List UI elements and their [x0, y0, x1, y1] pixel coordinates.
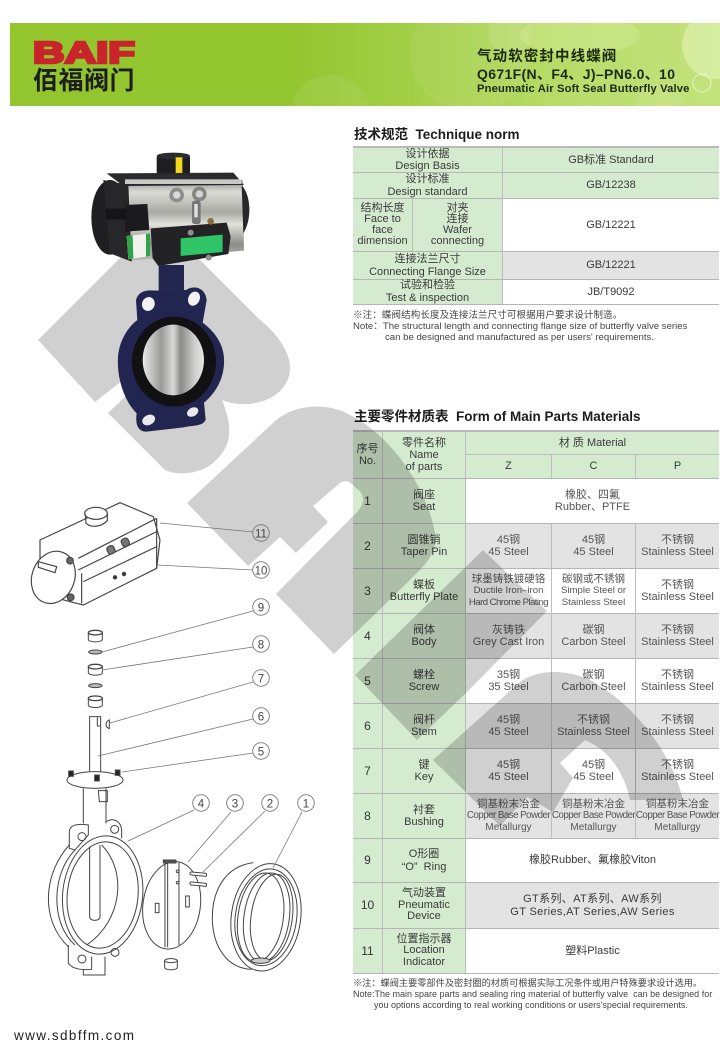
row 5 screw: Stainless Steel — [641, 681, 714, 693]
part number callouts: 8 — [258, 640, 264, 652]
part number callouts: 1 — [303, 798, 309, 810]
table header: 零件名称 — [402, 437, 446, 449]
row 11 location indicator: 位置指示器 — [396, 933, 452, 945]
actuator drawing — [24, 503, 160, 610]
table: technique norm — [353, 146, 719, 305]
row 4 body: Carbon Steel — [561, 636, 626, 648]
table header: C — [590, 460, 597, 472]
row: face to face: 结构长度 — [360, 202, 404, 214]
table: main parts materials — [353, 430, 719, 974]
product title: Q671F(N、F4、J)–PN6.0、10 — [477, 66, 675, 82]
row: face to face: face — [372, 224, 393, 236]
row 11 location indicator: Indicator — [403, 956, 445, 968]
row 8 bushing: Copper Base Powder — [552, 810, 635, 821]
heading: main parts materials: 主要零件材质表 Form of Main Parts Materials — [354, 409, 641, 424]
row 10 pneumatic device: GT Series,AT Series,AW Series — [510, 906, 675, 918]
row 3 butterfly plate: Ductile Iron–iron — [474, 585, 543, 596]
row 7 key: 45钢 — [497, 759, 520, 771]
row 11 location indicator: 塑料Plastic — [565, 945, 620, 957]
table header: Name — [409, 449, 439, 461]
row 1 seat: 阀座 — [413, 489, 435, 501]
part number callouts: 2 — [267, 798, 273, 810]
row: design basis: 设计依据 — [405, 148, 449, 160]
row 3 butterfly plate: Simple Steel or — [561, 585, 626, 596]
note: main parts materials: you options according to real working conditions or users'special requirements. — [374, 1000, 688, 1010]
row: flange size: 连接法兰尺寸 — [394, 252, 460, 264]
row 6 stem: Stainless Steel — [641, 726, 714, 738]
row 7 key: 7 — [364, 764, 371, 778]
table header: No. — [359, 455, 376, 467]
row: design standard: Design standard — [387, 186, 468, 198]
row 7 key: Stainless Steel — [641, 771, 714, 783]
row 9 o ring: “O” Ring — [402, 860, 446, 872]
row 9 o ring: 橡胶Rubber、氟橡胶Viton — [529, 854, 656, 866]
row 8 bushing: 衬套 — [413, 804, 435, 816]
row 4 body: 碳钢 — [582, 624, 604, 636]
part number callouts: 4 — [198, 798, 205, 810]
row 6 stem: Stainless Steel — [557, 726, 630, 738]
banner bubbles — [291, 23, 720, 106]
part number callouts: 10 — [255, 566, 267, 578]
row 7 key — [353, 749, 719, 794]
part number callouts — [193, 525, 314, 811]
row 11 location indicator — [353, 929, 719, 974]
row 5 screw: Carbon Steel — [561, 681, 626, 693]
row: face to face: Face to — [364, 213, 401, 225]
row 2 taper pin: 不锈钢 — [661, 534, 694, 546]
row 4 body: 4 — [364, 629, 371, 643]
note: technique norm: can be designed and manufactured as per users' requirements. — [385, 332, 654, 343]
row 1 seat — [353, 479, 719, 524]
row: design standard: 设计标准 — [405, 173, 449, 185]
row 3 butterfly plate: Butterfly Plate — [390, 591, 458, 603]
row 5 screw — [353, 659, 719, 704]
row: design basis: GB标准 Standard — [568, 154, 654, 166]
row 3 butterfly plate: 碳钢或不锈钢 — [562, 573, 625, 585]
row: face to face: GB/12221 — [586, 219, 636, 231]
row 2 taper pin: 2 — [364, 539, 371, 553]
row 7 key: 45 Steel — [573, 771, 614, 783]
row 3 butterfly plate: 蝶板 — [413, 579, 435, 591]
row: face to face: 对夹 — [446, 202, 468, 214]
row 8 bushing: Bushing — [404, 816, 444, 828]
row 10 pneumatic device: Pneumatic — [398, 899, 450, 911]
row 10 pneumatic device: 气动装置 — [402, 887, 446, 899]
row 3 butterfly plate: Hard Chrome Plating — [469, 597, 548, 608]
row 9 o ring: O形圈 — [409, 848, 439, 860]
row 9 o ring: 9 — [364, 853, 371, 867]
logo chinese name: 佰福阀门 — [33, 67, 135, 95]
row 7 key: 45 Steel — [488, 771, 529, 783]
row: flange size: GB/12221 — [586, 259, 636, 271]
row 8 bushing: 8 — [364, 809, 371, 823]
row: test: Test & inspection — [386, 292, 469, 304]
row: design standard: GB/12238 — [586, 179, 636, 191]
row 5 screw: 螺栓 — [413, 669, 435, 681]
row 3 butterfly plate — [353, 569, 719, 614]
row 6 stem: 45 Steel — [488, 726, 529, 738]
row 1 seat: Seat — [413, 501, 435, 513]
row 6 stem: 阀杆 — [413, 714, 435, 726]
solenoid valve — [106, 204, 231, 266]
row 2 taper pin: 45 Steel — [573, 546, 614, 558]
row 2 taper pin: 45 Steel — [488, 546, 529, 558]
note: technique norm: ※注：蝶阀结构长度及连接法兰尺寸可根据用户要求设计制造。 — [353, 310, 622, 321]
product title — [477, 48, 689, 95]
row: face to face: dimension — [357, 235, 408, 247]
table header: 序号 — [356, 443, 378, 455]
header banner — [10, 23, 720, 106]
row 10 pneumatic device: 10 — [361, 898, 374, 912]
actuator — [91, 173, 249, 262]
table header: of parts — [406, 461, 442, 473]
row 6 stem: 45钢 — [497, 714, 520, 726]
table header: 材 质 Material — [559, 437, 626, 449]
row 5 screw: 碳钢 — [582, 669, 604, 681]
row 6 stem: Stem — [411, 726, 437, 738]
row 4 body: 阀体 — [413, 624, 435, 636]
row 7 key: 45钢 — [582, 759, 605, 771]
valve body — [118, 265, 224, 432]
row 8 bushing: 铜基粉末冶金 — [477, 798, 540, 810]
row: design standard — [353, 173, 719, 199]
row 3 butterfly plate: 球墨铸铁镀硬铬 — [472, 573, 545, 585]
note: technique norm: Note：The structural length and connecting flange size of butterfly valve series — [353, 321, 687, 332]
row 6 stem: 6 — [364, 719, 371, 733]
row 5 screw: 5 — [364, 674, 371, 688]
row 7 key: 不锈钢 — [661, 759, 694, 771]
row 5 screw: Screw — [409, 681, 439, 693]
row 2 taper pin: Taper Pin — [401, 546, 447, 558]
row 10 pneumatic device: GT系列、AT系列、AW系列 — [523, 893, 662, 905]
row: test: 试验和检验 — [400, 279, 455, 291]
row 9 o ring — [353, 839, 719, 883]
website footer: www.sdbffm.com — [14, 1028, 135, 1043]
row 11 location indicator: Location — [403, 944, 445, 956]
row: face to face — [353, 199, 719, 252]
row 2 taper pin: 圆锥销 — [407, 534, 440, 546]
heading: technique norm: 技术规范 Technique norm — [354, 127, 520, 142]
row 8 bushing: 铜基粉末冶金 — [562, 798, 625, 810]
row: flange size — [353, 252, 719, 280]
row 8 bushing: Metallurgy — [654, 822, 701, 833]
table header: Z — [505, 460, 512, 472]
row 2 taper pin — [353, 524, 719, 569]
row 6 stem: 不锈钢 — [577, 714, 610, 726]
row 2 taper pin: 45钢 — [497, 534, 520, 546]
row 8 bushing: Metallurgy — [570, 822, 617, 833]
row: face to face: Wafer — [443, 224, 472, 236]
row 3 butterfly plate: 不锈钢 — [661, 579, 694, 591]
table header — [353, 432, 719, 479]
row 4 body — [353, 614, 719, 659]
row 10 pneumatic device: Device — [407, 910, 441, 922]
row 5 screw: 35钢 — [497, 669, 520, 681]
row 6 stem: 不锈钢 — [661, 714, 694, 726]
part number callouts: 11 — [255, 528, 267, 540]
row: test — [353, 280, 719, 305]
row 4 body: Body — [411, 636, 437, 648]
row 3 butterfly plate: Stainless Steel — [562, 597, 625, 608]
product title: Pneumatic Air Soft Seal Butterfly Valve — [477, 83, 689, 95]
row 2 taper pin: 45钢 — [582, 534, 605, 546]
part number callouts: 6 — [258, 712, 264, 724]
product title: 气动软密封中线蝶阀 — [477, 49, 617, 65]
row 8 bushing: Metallurgy — [485, 822, 532, 833]
row 4 body: 灰铸铁 — [492, 624, 525, 636]
row: design basis: Design Basis — [395, 160, 460, 172]
row 1 seat: 1 — [364, 494, 371, 508]
note: main parts materials — [353, 978, 712, 1010]
row 2 taper pin: Stainless Steel — [641, 546, 714, 558]
row 4 body: Grey Cast Iron — [473, 636, 544, 648]
part number callouts: 3 — [232, 798, 238, 810]
row 7 key: Key — [415, 771, 433, 783]
part number callouts: 7 — [258, 674, 264, 686]
row 4 body: Stainless Steel — [641, 636, 714, 648]
row 1 seat: 橡胶、四氟 — [565, 489, 620, 501]
row 1 seat: Rubber、PTFE — [555, 501, 630, 513]
note: main parts materials: Note:The main spare parts and sealing ring material of butterfly valve can be designed for — [353, 989, 712, 999]
row 5 screw: 35 Steel — [488, 681, 529, 693]
row 3 butterfly plate: Stainless Steel — [641, 591, 714, 603]
row 8 bushing: Copper Base Powder — [467, 810, 550, 821]
row: face to face: 连接 — [446, 213, 468, 225]
row 11 location indicator: 11 — [361, 944, 374, 958]
part number callouts: 9 — [258, 602, 264, 614]
valve body, disc, seat drawing — [48, 770, 308, 976]
part number callouts: 5 — [258, 746, 264, 758]
row 6 stem — [353, 704, 719, 749]
bushings, o-rings, key, stem, flange — [88, 630, 109, 773]
row: flange size: Connecting Flange Size — [369, 266, 486, 278]
row 5 screw: 不锈钢 — [661, 669, 694, 681]
row 8 bushing — [353, 794, 719, 839]
row 3 butterfly plate: 3 — [364, 584, 371, 598]
row 8 bushing: 铜基粉末冶金 — [646, 798, 709, 810]
row 4 body: 不锈钢 — [661, 624, 694, 636]
row: face to face: connecting — [431, 235, 484, 247]
row 8 bushing: Copper Base Powder — [636, 810, 719, 821]
leader lines — [98, 523, 302, 872]
note: main parts materials: ※注：蝶阀主要零部件及密封圈的材质可根据实际工况条件或用户特殊要求设计选用。 — [353, 978, 702, 988]
position indicator — [157, 153, 190, 176]
row: design basis — [353, 148, 719, 173]
row: test: JB/T9092 — [587, 286, 635, 298]
table header: P — [674, 460, 681, 472]
row 7 key: 键 — [418, 759, 430, 771]
row 10 pneumatic device — [353, 883, 719, 929]
note: technique norm — [353, 310, 688, 343]
valve photo — [91, 152, 250, 432]
